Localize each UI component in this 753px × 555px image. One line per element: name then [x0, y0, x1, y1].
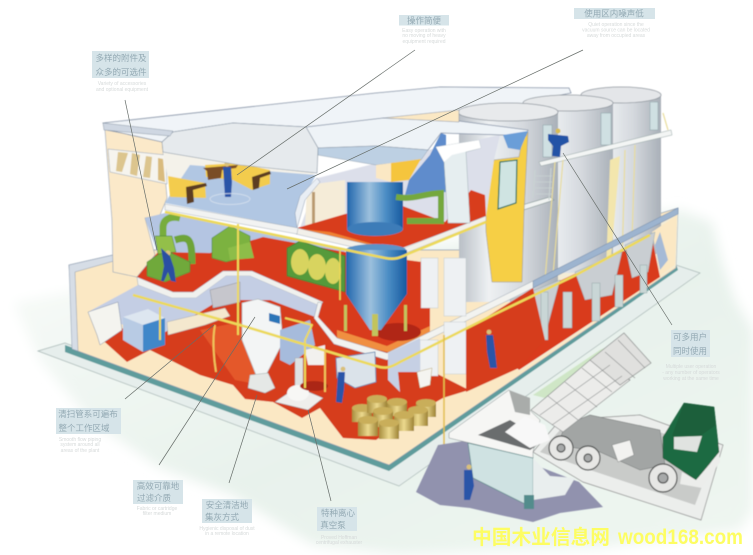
filter cyclone: [242, 299, 283, 393]
callout: exhauster: [316, 507, 363, 546]
upper room cream wall: [305, 180, 345, 232]
callout: piping: Smooth flow piping: [59, 437, 101, 443]
silo ladder and rails: [533, 113, 668, 280]
top level blue floor room: [163, 152, 320, 228]
wheels: [549, 436, 677, 492]
work table: [167, 308, 230, 335]
lower mid floor edge: [314, 281, 533, 360]
callout: multiple users: 同时使用: [673, 346, 707, 356]
silo base red floor: [500, 238, 660, 370]
right end cream wall: [652, 215, 677, 276]
roof front plane: [103, 110, 528, 182]
lower level red floor: [97, 300, 469, 440]
lower left wall edge: [69, 255, 114, 351]
callout: piping: [56, 408, 121, 454]
callout: easy operation: no moving of heavy: [402, 33, 446, 39]
callout: filter media: 过滤介质: [137, 493, 171, 503]
callout: dust disposal: [199, 499, 255, 537]
callout: quiet operation: [574, 8, 655, 39]
pit: [416, 440, 603, 522]
tipper floor: [531, 360, 630, 432]
columns: [420, 258, 466, 376]
callout: piping: system around all: [60, 442, 100, 448]
callout: exhauster: Proved Hoffman: [321, 535, 357, 541]
callout: multiple users: working at the same time: [663, 376, 719, 382]
upper blue tank: [347, 182, 403, 236]
callout: quiet operation: vacuum source can be located: [582, 28, 650, 34]
drum unit: [287, 241, 345, 292]
ground plane: [14, 210, 753, 555]
upper floor edge: [296, 216, 486, 257]
callout: easy operation: Easy operation with: [402, 28, 446, 34]
callout: multiple users: 可多用户: [673, 332, 707, 342]
callout: multiple users: [662, 330, 720, 382]
callout: exhauster: 真空泵: [320, 520, 346, 530]
centrifugal exhauster: [275, 358, 323, 410]
upper right red floor: [297, 190, 486, 250]
callout: easy operation: equipment required: [402, 39, 446, 45]
callout: quiet operation: away from occupied areas: [587, 33, 646, 39]
operator on silo platform: [548, 128, 569, 157]
callout: dust disposal: 安全清洁地: [206, 500, 249, 510]
green duct: [396, 193, 441, 221]
grating: [478, 420, 545, 450]
pit operator: [464, 464, 474, 500]
road pit inner shade: [540, 425, 715, 505]
band along right side: [533, 208, 678, 288]
filter box centre: [212, 226, 250, 262]
callout: accessories: 多样的附件及: [95, 53, 147, 63]
silos: [458, 87, 661, 302]
left desk: [168, 176, 207, 204]
lower level equipment: [123, 282, 436, 439]
callout: quiet operation: Quiet operation since the: [588, 22, 644, 28]
callout: dust disposal: in a remote location: [205, 531, 249, 537]
cabinet: [123, 309, 165, 352]
yellow wall section: [485, 130, 528, 282]
silo middle: [523, 95, 620, 273]
window band: [108, 149, 167, 184]
exhauster shadow: [300, 381, 328, 391]
lower left room opening: [88, 302, 122, 345]
small hopper: [417, 368, 432, 388]
callout: exhauster: 特种离心: [321, 508, 355, 518]
watermark: wood168.com: [617, 526, 743, 549]
right lower room floor: [466, 288, 545, 392]
machine white box: [305, 345, 325, 365]
right building side under silos: [500, 208, 678, 372]
hopper: [468, 443, 575, 509]
building lower mass: [69, 208, 678, 465]
silo side pipe walkway: [539, 130, 672, 166]
mid level back wall: [145, 213, 345, 300]
left operator: [161, 248, 176, 282]
callout: filter media: [133, 480, 183, 517]
plant illustration: [38, 87, 723, 522]
callout: filter media: 高效可靠地: [137, 481, 180, 491]
service platform: [498, 197, 554, 216]
foundation teal edge: [65, 264, 678, 471]
callout: quiet operation: 使用区内噪声低: [584, 8, 644, 18]
lower blue tank: [344, 244, 421, 341]
callout: dust disposal: 集灰方式: [205, 512, 239, 522]
mid level red floor: [137, 237, 430, 353]
receiving back wall: [509, 390, 530, 415]
mid floor edge: [137, 271, 323, 306]
silo cones and legs: [506, 232, 655, 360]
white fuel tank: [612, 440, 634, 462]
dust pile: [505, 416, 550, 448]
callout: easy operation: [399, 15, 449, 45]
upper floor back walls: [300, 135, 500, 250]
barrels: [352, 395, 436, 439]
callout: accessories: [92, 51, 149, 93]
green machines mid level: [147, 217, 345, 292]
watermark: 中国木业信息网: [472, 525, 610, 549]
wall window: [498, 160, 517, 209]
truck unloading station: [416, 333, 723, 522]
receiving slab: [449, 390, 540, 458]
callout: multiple users: Multiple user operation: [666, 364, 717, 370]
left duct: [163, 217, 180, 240]
road bay: [533, 415, 723, 520]
callout: dust disposal: Hygienic disposal of dust: [199, 526, 255, 532]
truck chassis: [558, 415, 665, 470]
upper left wall: [105, 130, 167, 277]
cab: [663, 403, 720, 488]
top operator: [223, 161, 232, 197]
silo rear: [581, 87, 661, 254]
callout: accessories: 众多的可选件: [95, 67, 147, 77]
leader lines: [125, 50, 672, 501]
pale green verge: [533, 340, 640, 398]
blue inner wall: [405, 133, 446, 195]
operator with box: [336, 352, 376, 403]
lower level back wall: [88, 276, 337, 360]
callout: accessories: and optional equipment: [96, 87, 149, 93]
grey rack: [210, 282, 240, 308]
centre desk: [203, 163, 271, 190]
lower right operator: [486, 330, 497, 368]
ceiling: [162, 123, 318, 173]
callout: piping: 整个工作区域: [58, 423, 110, 433]
roof cream triangle: [383, 110, 459, 122]
callout: accessories: Variety of accessories: [98, 81, 147, 87]
yellow piping: [133, 212, 650, 486]
callout: easy operation: 操作简便: [407, 16, 441, 26]
callout: filter media: filter medium: [143, 511, 171, 517]
callout: piping: areas of the plant: [61, 448, 100, 454]
silo front: [458, 103, 558, 302]
roof fascia: [103, 123, 173, 136]
right end blue wedge: [655, 232, 668, 270]
tipper side: [590, 333, 651, 385]
foundation slab: [38, 265, 700, 486]
watermark: [472, 525, 743, 549]
white column with hood: [436, 140, 481, 223]
filter box left: [147, 250, 190, 282]
callout: exhauster: centrifugal exhauster: [316, 540, 363, 546]
callout: multiple users: - any number of operators: [662, 370, 720, 376]
callout: filter media: Fabric or cartridge: [137, 506, 177, 512]
callout: piping: 清扫管系可遍布: [58, 409, 118, 419]
top floor edge: [165, 204, 298, 234]
roof rear plane: [103, 87, 571, 142]
side cabinet: [280, 320, 315, 365]
